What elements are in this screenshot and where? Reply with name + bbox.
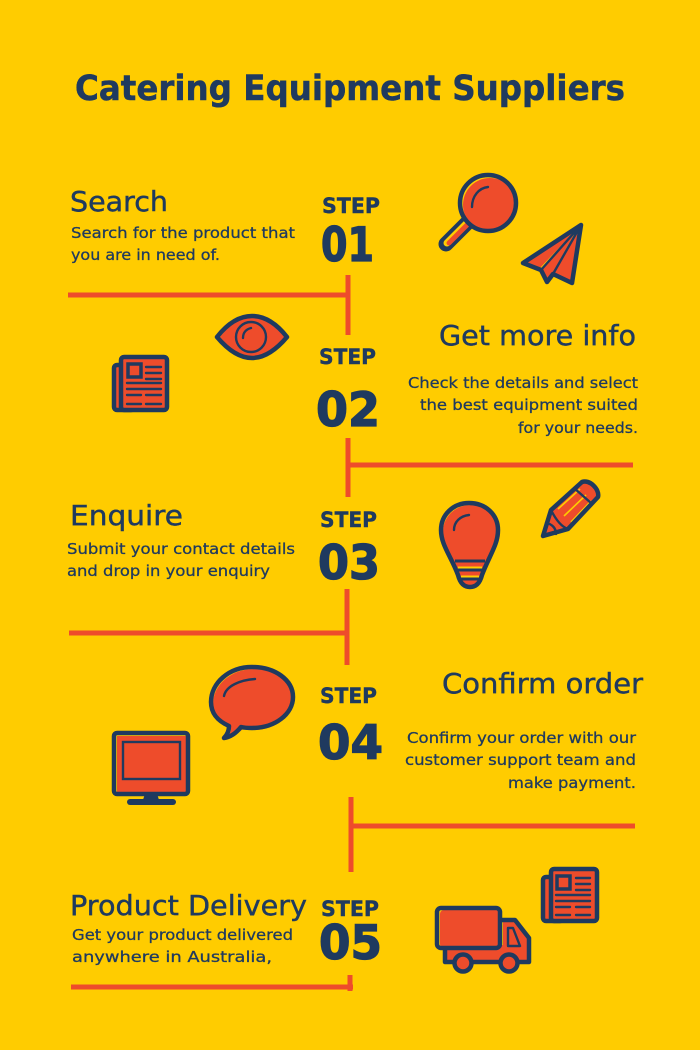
step label 05: 05	[319, 916, 382, 971]
text block: search description: you are in need of.	[71, 246, 220, 264]
text block: product delivery description	[72, 926, 293, 966]
heading: Enquire: Enquire	[70, 499, 183, 532]
panel: step 2	[114, 316, 638, 438]
text block: search description: Search for the product that	[71, 224, 295, 242]
step label 01: STEP	[322, 194, 380, 218]
text block: confirm order description: customer support team and	[405, 751, 636, 769]
step label 02: 02	[316, 383, 380, 438]
panel: step 1	[70, 175, 581, 283]
text block: confirm order description	[405, 729, 637, 792]
icon: magnifying glass	[446, 175, 517, 244]
timeline connector: step 3	[69, 589, 348, 665]
text block: enquire description	[67, 540, 295, 580]
icon: eye	[217, 316, 289, 358]
text block: product delivery description: anywhere in Australia,	[72, 948, 272, 966]
text block: get more info description: the best equipment suited	[420, 396, 638, 414]
step label 01: 01	[321, 218, 374, 273]
step label 03: 03	[318, 536, 380, 591]
step label 05: STEP	[321, 897, 379, 921]
step label 02	[316, 345, 380, 438]
icon: newspaper	[543, 869, 597, 921]
text block: confirm order description: Confirm your order with our	[407, 729, 637, 747]
text block: enquire description: Submit your contact details	[67, 540, 295, 558]
step label 04	[318, 684, 383, 771]
icon: computer monitor	[114, 733, 188, 802]
step label 03: STEP	[320, 508, 377, 532]
step label 04: STEP	[320, 684, 377, 708]
text block: get more info description	[408, 374, 638, 437]
panel: step 3	[67, 481, 598, 591]
timeline connector: step 1	[68, 275, 350, 335]
text block: enquire description: and drop in your enquiry	[67, 562, 270, 580]
step label 02: STEP	[319, 345, 376, 369]
timeline connector: step 5	[71, 975, 353, 991]
icon: delivery truck	[437, 908, 529, 972]
step label 03	[318, 508, 380, 591]
icon: speech bubble	[211, 667, 293, 738]
icon: paper airplane	[523, 225, 581, 283]
text block: search description	[71, 224, 295, 264]
text block: get more info description: for your needs.	[518, 419, 638, 437]
panel: step 4	[114, 667, 644, 802]
heading: Product Delivery: Product Delivery	[70, 889, 307, 922]
step label 04: 04	[318, 716, 383, 771]
timeline connector: step 4	[351, 797, 635, 872]
icon: pencil	[543, 481, 598, 536]
text block: get more info description: Check the details and select	[408, 374, 638, 392]
panel: step 5	[70, 869, 597, 972]
text block: product delivery description: Get your product delivered	[72, 926, 293, 944]
timeline connector: step 2	[348, 438, 633, 497]
heading: Confirm order: Confirm order	[442, 667, 644, 700]
heading: Search: Search	[70, 185, 168, 218]
heading: Get more info: Get more info	[439, 319, 636, 352]
text block: confirm order description: make payment.	[508, 774, 636, 792]
icon: light bulb	[441, 503, 500, 587]
title: Catering Equipment Suppliers	[75, 69, 625, 109]
icon: newspaper	[114, 357, 167, 410]
step label 01	[321, 194, 380, 273]
